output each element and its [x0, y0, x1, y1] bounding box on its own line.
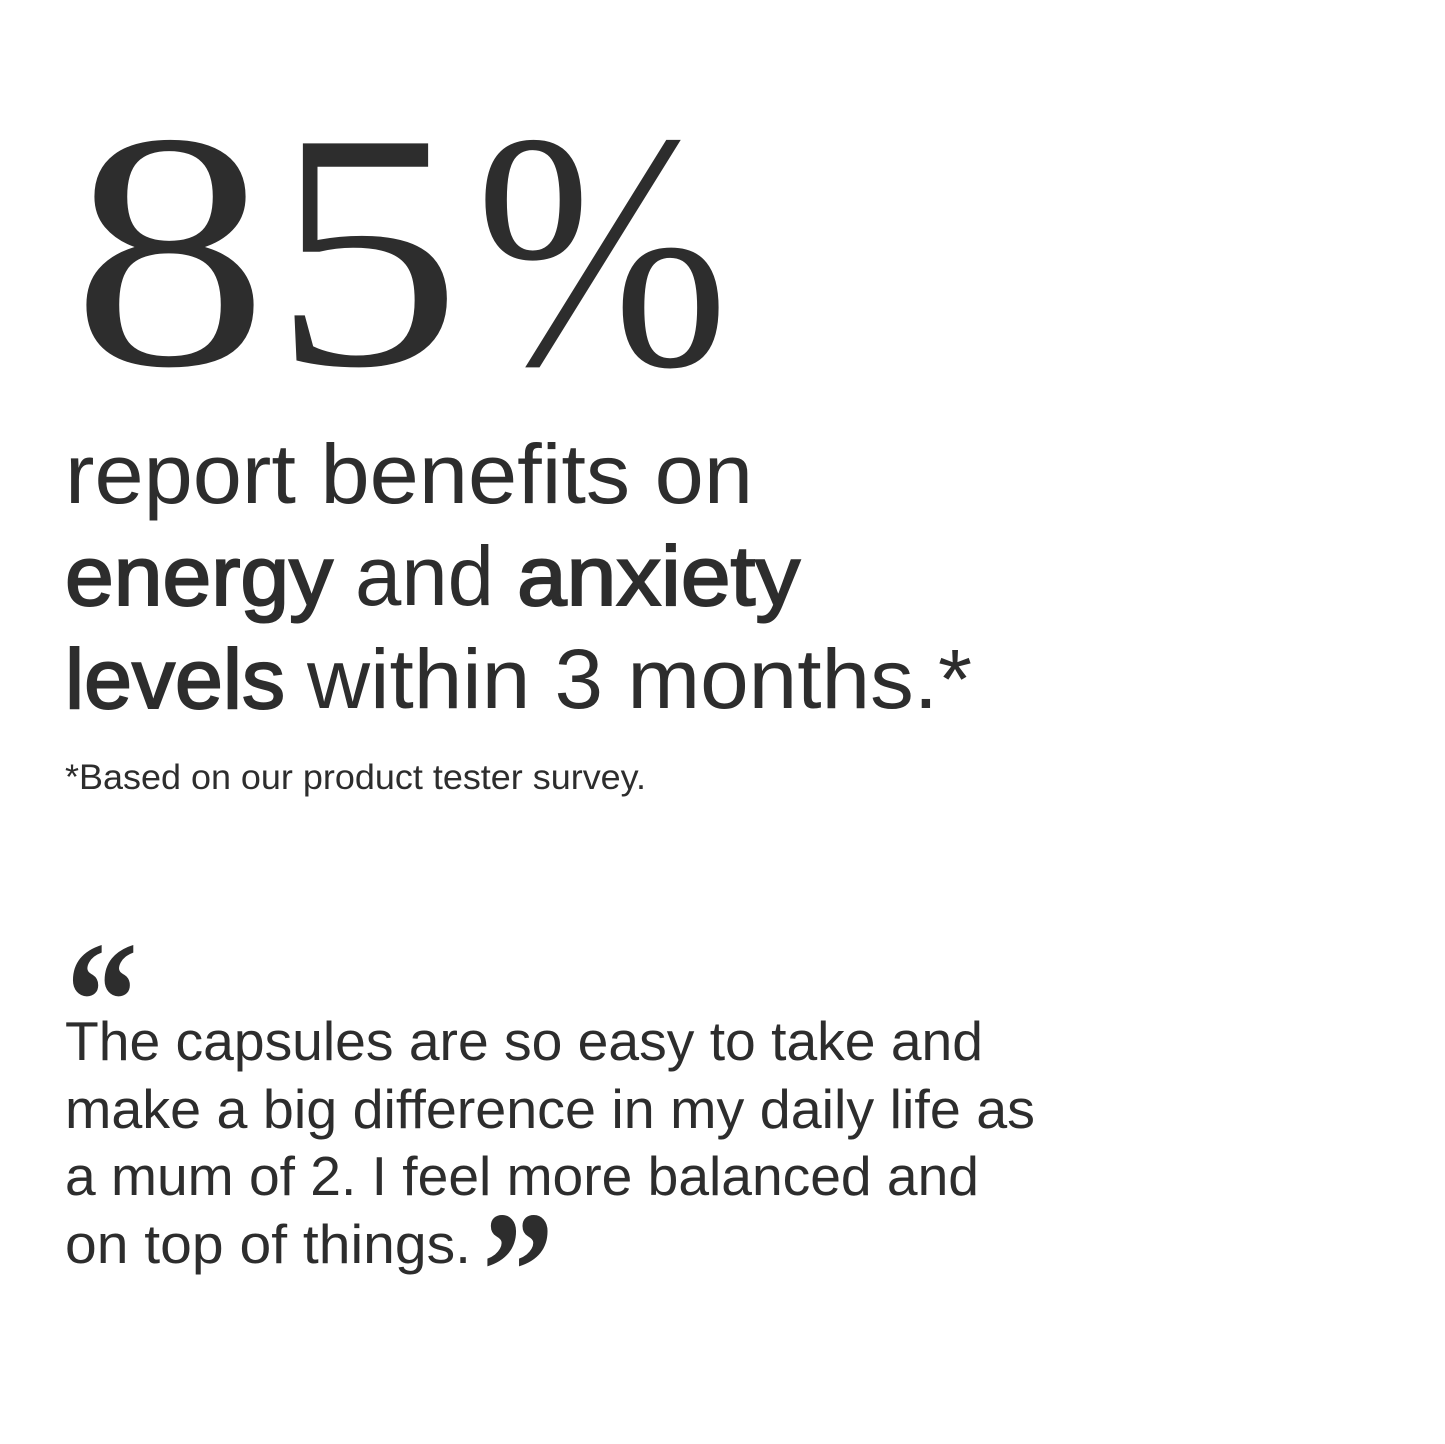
statement text block: energy	[65, 529, 333, 623]
statement text block: anxiety	[517, 529, 800, 623]
statement text block	[65, 427, 972, 726]
footnote: *Based on our product tester survey.	[65, 758, 646, 797]
headline statistic: 85%: 8	[70, 62, 270, 439]
testimonial quote text: The capsules are so easy to take and	[65, 1010, 983, 1072]
headline statistic: 85%	[70, 62, 730, 439]
testimonial quote text	[65, 1010, 1035, 1275]
headline statistic: 85%: 5	[271, 62, 463, 439]
statement text block: and	[355, 529, 494, 623]
icon: opening quote mark: “	[66, 907, 138, 1095]
statement text block: report benefits on	[65, 427, 753, 521]
headline statistic: 85%: %	[474, 62, 730, 439]
testimonial quote text: make a big difference in my daily life as	[65, 1078, 1035, 1140]
statement text block: within 3 months.*	[306, 632, 972, 726]
icon: closing quote mark: ”	[482, 1177, 554, 1365]
testimonial quote text: a mum of 2. I feel more balanced and	[65, 1145, 979, 1207]
statement text block: levels	[65, 632, 285, 726]
testimonial quote text: on top of things.	[65, 1213, 471, 1275]
